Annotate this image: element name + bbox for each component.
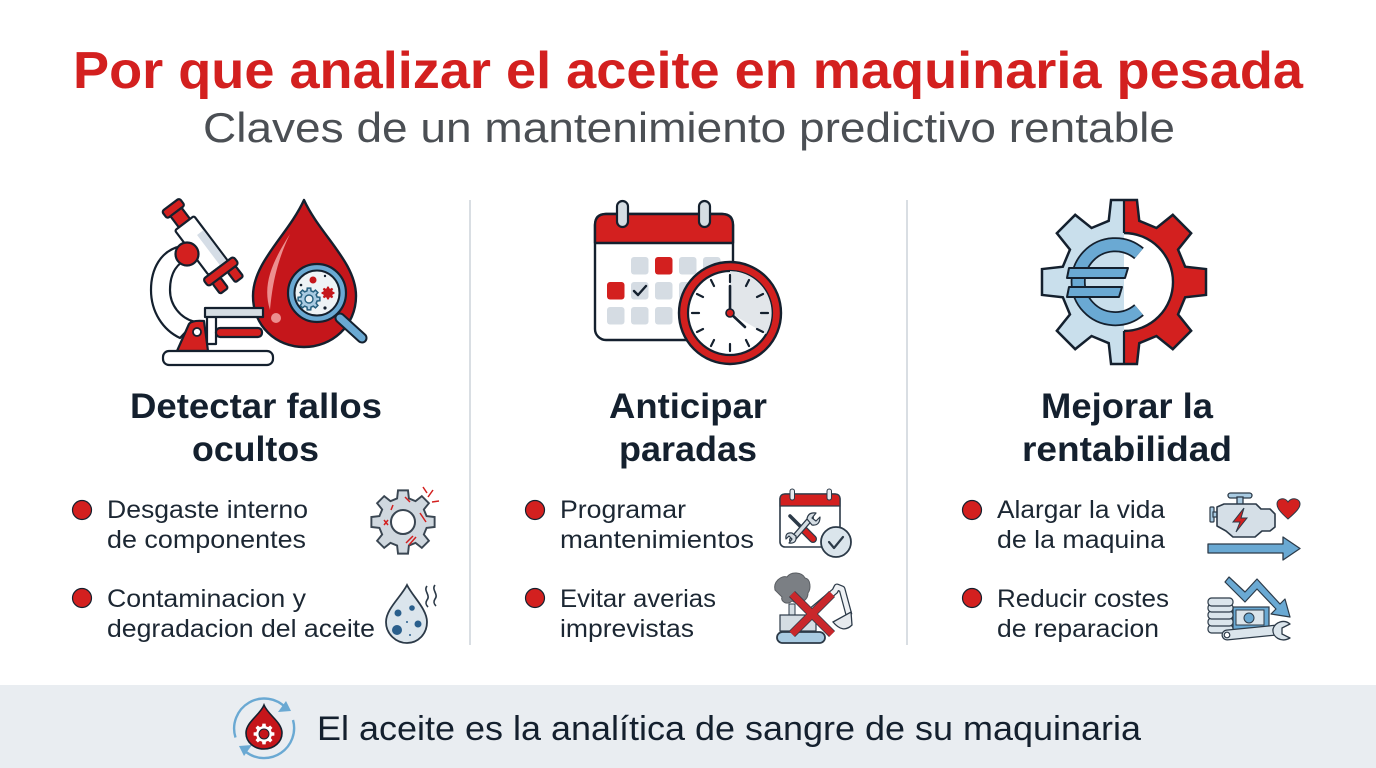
heading: rentabilidad [1022, 430, 1232, 469]
footer band [0, 685, 1376, 768]
bullet: evitar averias: Evitar averias [560, 585, 716, 613]
bullet: evitar averias [526, 585, 716, 643]
bullet: desgaste: de componentes [107, 526, 306, 554]
bullet: contaminacion [72, 585, 375, 643]
panel: anticipar paradas [526, 201, 852, 643]
heading [130, 387, 382, 469]
bullet: reducir costes: de reparacion [997, 615, 1159, 643]
bullet: alargar la vida [962, 496, 1165, 554]
icon: falling costs [1208, 577, 1290, 640]
bullet: programar: Programar [560, 496, 686, 524]
heading [609, 387, 767, 469]
panel: detectar fallos ocultos [72, 193, 439, 643]
footer text: El aceite es la analítica de sangre de su maquinaria [317, 710, 1141, 748]
bullet: reducir costes: Reducir costes [997, 585, 1169, 613]
panel: mejorar la rentabilidad [962, 200, 1300, 643]
bullet: programar: mantenimientos [560, 526, 754, 554]
bullet: alargar la vida: Alargar la vida [997, 496, 1165, 524]
icon: broken excavator [775, 573, 852, 643]
icon: gear with euro [1042, 200, 1206, 364]
bullet: contaminacion: Contaminacion y [107, 585, 307, 613]
bullet: alargar la vida: de la maquina [997, 526, 1165, 554]
icon: contaminated drop [386, 585, 436, 643]
heading: Anticipar [609, 387, 767, 426]
bullet: contaminacion: degradacion del aceite [107, 615, 375, 643]
heading: Mejorar la [1041, 387, 1214, 426]
heading [1022, 387, 1232, 469]
title: Por que analizar el aceite en maquinaria pesada [73, 42, 1304, 100]
icon: oil drop with magnifier [205, 200, 362, 347]
bullet: desgaste: Desgaste interno [107, 496, 308, 524]
bullet: reducir costes [962, 585, 1169, 643]
bullet: evitar averias: imprevistas [560, 615, 694, 643]
subtitle: Claves de un mantenimiento predictivo rentable [203, 104, 1175, 151]
icon: oil drop with cycle arrows [234, 699, 294, 758]
heading: ocultos [192, 430, 319, 469]
icon: calendar with clock [595, 201, 781, 364]
icon: engine with heart and arrow [1208, 493, 1300, 560]
heading: Detectar fallos [130, 387, 382, 426]
icon: worn gear [371, 487, 439, 554]
heading: paradas [619, 430, 757, 469]
bullet: programar [526, 496, 754, 554]
icon: microscope [151, 193, 273, 365]
bullet: desgaste [72, 496, 308, 554]
icon: maintenance calendar [780, 489, 851, 557]
